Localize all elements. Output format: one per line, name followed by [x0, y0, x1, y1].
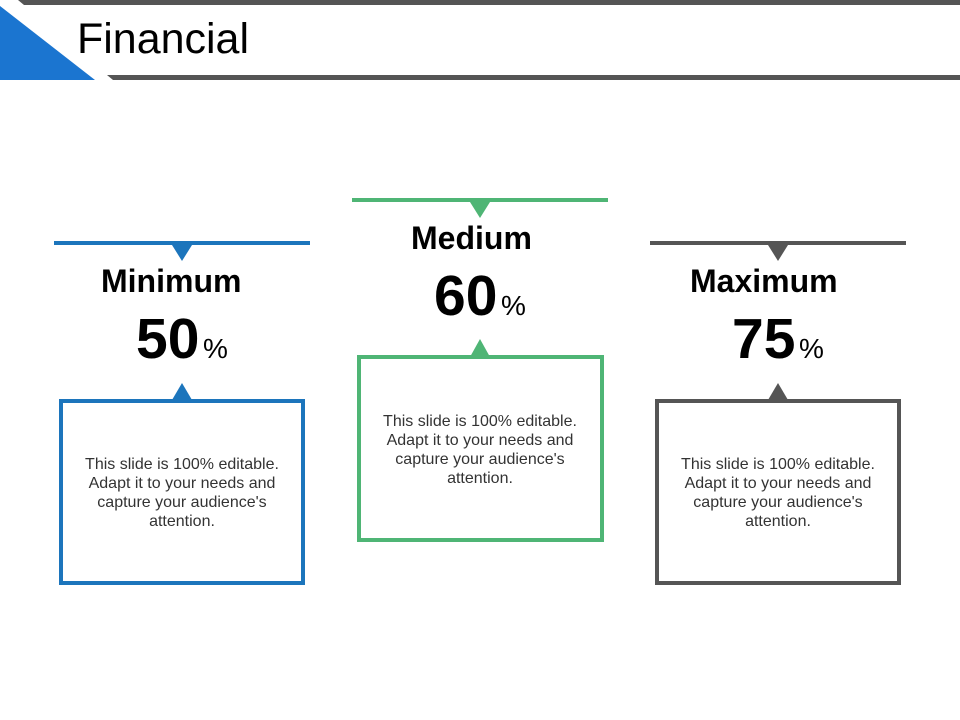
text box: minimum: Adapt it to your needs and — [89, 475, 275, 492]
text box: maximum: attention. — [745, 513, 811, 530]
value: 75% — [732, 307, 824, 371]
heading: minimum: Minimum — [101, 263, 241, 299]
value: 60%: % — [501, 290, 526, 321]
heading: maximum: Maximum — [690, 263, 838, 299]
text box: maximum: capture your audience's — [693, 494, 863, 511]
panel: minimum — [54, 241, 310, 583]
text box: medium: Adapt it to your needs and — [387, 432, 573, 449]
top marker: medium — [352, 198, 608, 218]
text box: minimum — [61, 383, 303, 583]
value: 60% — [434, 264, 526, 328]
top marker: maximum — [650, 241, 906, 261]
text box: maximum: Adapt it to your needs and — [685, 475, 871, 492]
text box: maximum — [657, 383, 899, 583]
text box: maximum: This slide is 100% editable. — [681, 456, 875, 473]
title: Financial — [77, 15, 249, 63]
header band — [0, 0, 960, 80]
top marker: minimum — [54, 241, 310, 261]
text box: medium: attention. — [447, 470, 513, 487]
heading: medium: Medium — [411, 220, 532, 256]
panel: medium — [352, 198, 608, 540]
text box: medium — [359, 339, 602, 540]
text box: minimum: This slide is 100% editable. — [85, 456, 279, 473]
value: 75%: 75 — [732, 307, 795, 371]
text box: medium: This slide is 100% editable. — [383, 413, 577, 430]
text box: medium: capture your audience's — [395, 451, 565, 468]
value: 50%: 50 — [136, 307, 199, 371]
value: 50%: % — [203, 333, 228, 364]
value: 50% — [136, 307, 228, 371]
text box: minimum: capture your audience's — [97, 494, 267, 511]
panel: maximum — [650, 241, 906, 583]
text box: minimum: attention. — [149, 513, 215, 530]
value: 60%: 60 — [434, 264, 497, 328]
value: 75%: % — [799, 333, 824, 364]
